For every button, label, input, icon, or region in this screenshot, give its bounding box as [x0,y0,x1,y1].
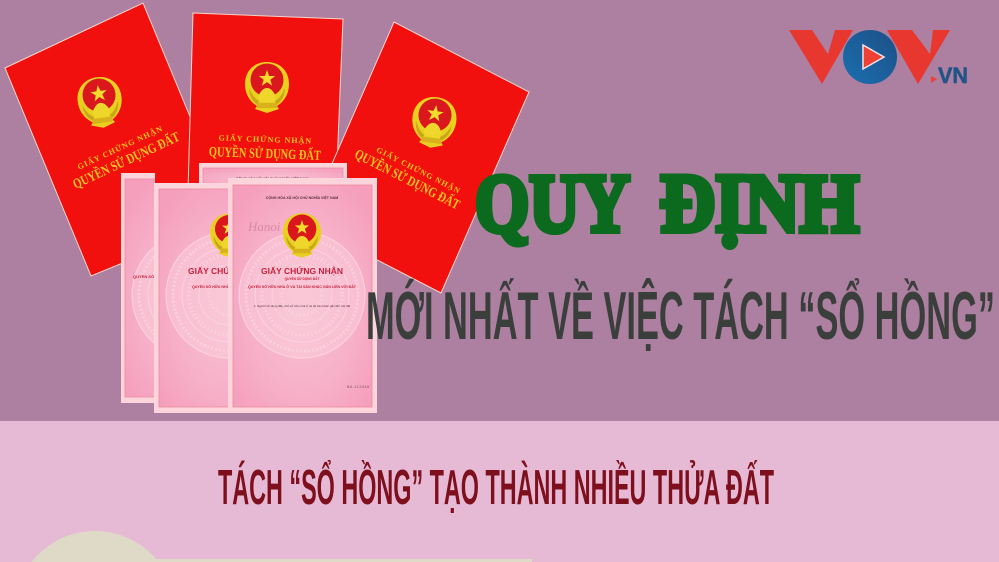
beige circle badge, cropped [32,531,158,562]
certificate body line: 1. Người sử dụng đất, chủ sở hữu nhà ở và tài sản khác gắn liền với đất [254,303,350,308]
beige content bar, cropped [150,559,532,562]
pink certificate: middle [154,183,228,413]
book label: right: QUYỀN SỬ DỤNG ĐẤT [352,145,463,213]
logo suffix: VN [938,63,968,88]
title: QUY ĐỊNH [475,157,859,249]
logo letter V right [887,30,950,84]
book label: left: QUYỀN SỬ DỤNG ĐẤT [70,128,183,193]
pink certificate: front [228,178,377,413]
emblem: middle certificate [210,214,228,257]
emblem: centre book [245,62,289,113]
logo letter V left [789,30,853,84]
logo circle with play button [843,30,897,84]
certificate serial: BA 112345 [347,385,370,389]
emblem: left book [75,74,125,131]
certificate national header: CỘNG HÒA XÃ HỘI CHỦ NGHĨA VIỆT NAM [266,195,338,200]
pink certificate: rear left: QUYỀN SỞ [133,274,155,279]
title: QUY ĐỊNH: ĐỊNH [660,157,859,249]
title: QUY ĐỊNH: QUY [475,157,630,249]
red certificate book: left [5,3,232,276]
certificate sub-heading 1: QUYỀN SỬ DỤNG ĐẤT [285,276,319,281]
emblem: front certificate [283,213,321,258]
red certificate book: centre [188,13,343,190]
book label: centre: QUYỀN SỬ DỤNG ĐẤT [209,143,322,164]
book label: centre: GIẤY CHỨNG NHẬN [218,132,312,146]
pink certificate: back [199,163,347,188]
certificate heading: middle: GIẤY CHỨNG NHẬN [188,265,270,276]
certificate heading: GIẤY CHỨNG NHẬN [261,265,343,276]
red certificate book: right [306,22,529,293]
certificate sub-heading 2: QUYỀN SỞ HỮU NHÀ Ở VÀ TÀI SẢN KHÁC GẮN LIỀN VỚI ĐẤT [248,284,357,289]
logo small arrow [931,76,937,83]
pink certificate: middle: QUYỀN SỞ HỮU NHÀ Ở VÀ TÀI SẢN KHÁC [192,284,266,289]
emblem: right book [409,94,459,151]
book label: left: GIẤY CHỨNG NHẬN [76,123,165,172]
logo: VOV.VN [789,30,968,88]
background: mauve header [0,0,999,421]
book label: right [352,137,468,213]
book label: centre [209,132,322,164]
background: pink lower band [0,421,999,562]
pink certificate: back: CỘNG HÒA XÃ HỘI CHỦ NGHĨA VIỆT NAM [236,176,308,181]
certificate signature: Hanoi [247,219,281,234]
pink certificate: rear left [121,173,155,403]
book label: right: GIẤY CHỨNG NHẬN [375,144,463,196]
